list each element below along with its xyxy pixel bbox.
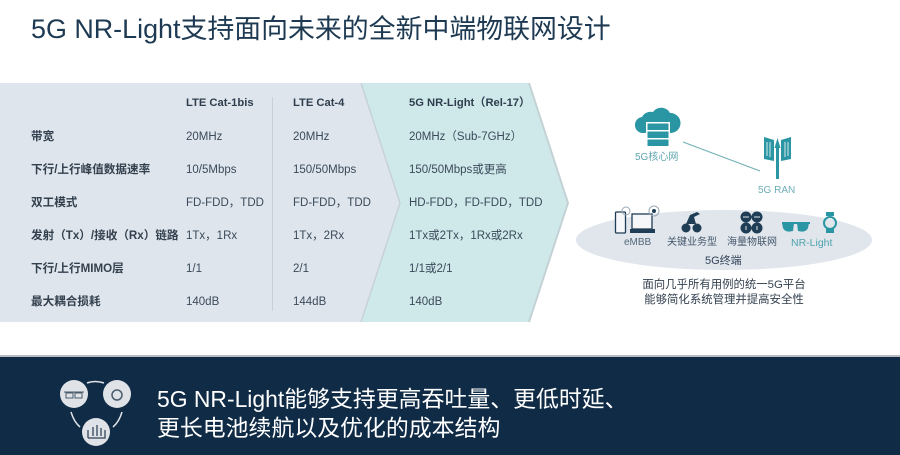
column: LTE Cat-1bis: 1Tx，1Rx bbox=[186, 230, 237, 242]
link line bbox=[683, 142, 760, 171]
column: 5G NR-Light: 1Tx或2Tx，1Rx或2Rx bbox=[409, 230, 523, 242]
caption: unified platform: 能够简化系统管理并提高安全性 bbox=[644, 294, 804, 306]
banner text: 5G NR-Light能够支持更高吞吐量、更低时延、 bbox=[157, 386, 628, 412]
column: LTE Cat-4: 1Tx，2Rx bbox=[293, 230, 344, 242]
label: eMBB: eMBB bbox=[624, 237, 651, 248]
column: 5G NR-Light: HD-FDD，FD-FDD，TDD bbox=[409, 197, 543, 209]
table row labels: 发射（Tx）/接收（Rx）链路 bbox=[31, 229, 179, 242]
column: LTE Cat-4: 20MHz bbox=[293, 131, 329, 143]
icon: cloud server bbox=[635, 108, 681, 147]
column: LTE Cat-1bis: 10/5Mbps bbox=[186, 164, 237, 176]
title: 5G NR-Light支持面向未来的全新中端物联网设计 bbox=[31, 14, 611, 44]
label: mission critical: 关键业务型 bbox=[667, 237, 717, 248]
column: LTE Cat-1bis: FD-FDD，TDD bbox=[186, 197, 264, 209]
column: 5G NR-Light: 150/50Mbps或更高 bbox=[409, 164, 507, 176]
caption: unified platform: 面向几乎所有用例的统一5G平台 bbox=[642, 279, 806, 291]
icon: mission-critical robot bbox=[682, 212, 702, 232]
column: 5G NR-Light: 20MHz（Sub-7GHz） bbox=[409, 131, 522, 143]
label: 5G RAN: 5G RAN bbox=[758, 185, 795, 196]
banner text: 更长电池续航以及优化的成本结构 bbox=[157, 415, 500, 441]
icon: massive IoT bbox=[740, 212, 762, 234]
bottom banner bbox=[0, 355, 900, 455]
column: LTE Cat-1bis: LTE Cat-1bis bbox=[186, 97, 254, 109]
column: LTE Cat-4: 144dB bbox=[293, 296, 326, 308]
table row labels: 下行/上行MIMO层 bbox=[31, 262, 124, 275]
column: LTE Cat-4: 2/1 bbox=[293, 263, 309, 275]
table row labels bbox=[31, 130, 179, 308]
column: LTE Cat-4: 150/50Mbps bbox=[293, 164, 356, 176]
label: 5G terminals: 5G终端 bbox=[705, 255, 742, 267]
icon: phone and laptop bbox=[616, 206, 659, 233]
column: LTE Cat-1bis: 140dB bbox=[186, 296, 219, 308]
table row labels: 下行/上行峰值数据速率 bbox=[31, 163, 150, 176]
column: LTE Cat-1bis: 20MHz bbox=[186, 131, 222, 143]
label: massive IoT: 海量物联网 bbox=[727, 237, 777, 248]
label: 5G core network: 5G核心网 bbox=[635, 152, 678, 163]
banner text bbox=[157, 386, 628, 441]
column: LTE Cat-4: FD-FDD，TDD bbox=[293, 197, 371, 209]
column: LTE Cat-4 bbox=[293, 97, 371, 308]
label: NR-Light: NR-Light bbox=[791, 237, 832, 249]
icon: glasses and watch bbox=[782, 212, 836, 233]
icon: 5G antenna tower bbox=[764, 137, 791, 179]
icon: three linked circles bbox=[60, 380, 131, 446]
table row labels: 最大耦合损耗 bbox=[31, 295, 101, 308]
column: LTE Cat-1bis bbox=[186, 97, 264, 308]
column: LTE Cat-1bis: 1/1 bbox=[186, 263, 202, 275]
column: LTE Cat-4: LTE Cat-4 bbox=[293, 97, 344, 109]
column: 5G NR-Light bbox=[409, 96, 543, 308]
column: 5G NR-Light: 140dB bbox=[409, 296, 442, 308]
column: 5G NR-Light: 1/1或2/1 bbox=[409, 263, 452, 275]
table row labels: 双工模式 bbox=[31, 196, 77, 209]
column: 5G NR-Light: 5G NR-Light（Rel-17） bbox=[409, 97, 530, 109]
caption: unified platform bbox=[642, 278, 806, 306]
table row labels: 带宽 bbox=[31, 130, 54, 143]
ellipse: 5G terminals bbox=[576, 210, 872, 270]
